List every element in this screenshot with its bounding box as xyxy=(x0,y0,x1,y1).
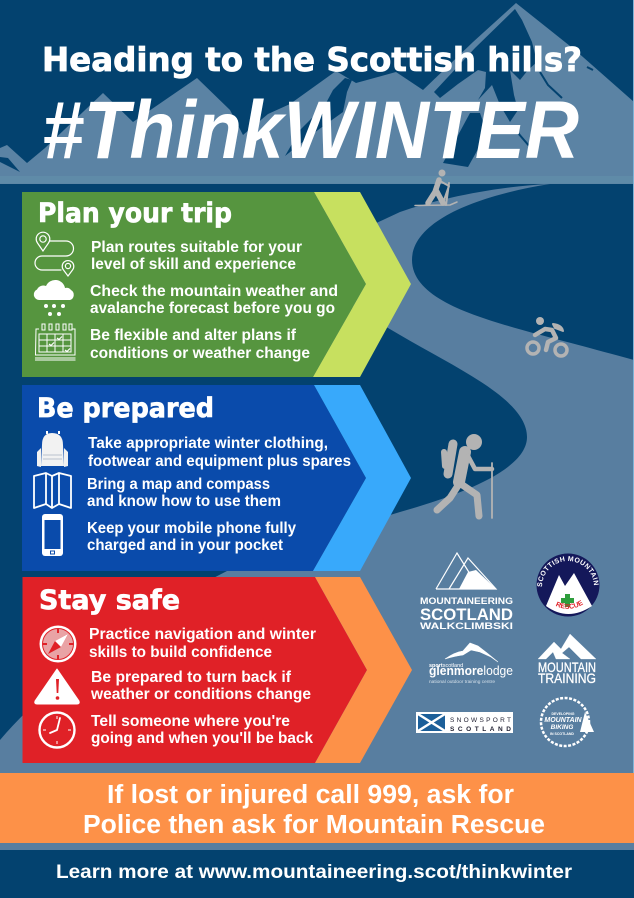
logo: glenmore lodge: sportscotland xyxy=(429,663,463,669)
logo: mountain training: TRAINING xyxy=(538,670,596,686)
text: clothing: Take appropriate winter clothing, xyxy=(88,435,328,452)
icon: cyclist xyxy=(527,317,567,356)
text: turn back: Be prepared to turn back if xyxy=(91,669,292,686)
icon: clock xyxy=(40,712,74,748)
callout: emergency: If lost or injured call 999, ask for xyxy=(107,781,514,809)
text: flexible: conditions or weather change xyxy=(90,345,310,362)
text: turn back xyxy=(90,669,311,703)
callout: emergency xyxy=(0,773,634,843)
text: tell someone: Tell someone where you're xyxy=(91,713,290,730)
logo: glenmore lodge: national outdoor training centre xyxy=(429,679,496,684)
icon: calendar xyxy=(35,324,76,360)
logo: snowsport scotland: SNOWSPORT xyxy=(450,717,511,724)
title: heading: Heading to the Scottish hills? xyxy=(42,40,582,79)
text: mobile phone: charged and in your pocket xyxy=(87,537,283,554)
text: clothing: footwear and equipment plus spares xyxy=(88,453,351,470)
winding path xyxy=(0,184,634,774)
logo: glenmore lodge: glenmorelodge xyxy=(429,664,513,678)
text: map and compass xyxy=(87,476,281,510)
logo: mountaineering scotland xyxy=(420,553,513,632)
title: hashtag: #ThinkWINTER xyxy=(42,85,579,176)
panel: plan your trip xyxy=(22,192,411,377)
icon: compass xyxy=(40,626,76,662)
text: weather: avalanche forecast before you go xyxy=(90,300,335,317)
heading: be prepared: Be prepared xyxy=(37,393,214,424)
logo: scottish mountain rescue xyxy=(536,554,600,616)
text: weather: Check the mountain weather and xyxy=(90,283,338,300)
logo: scottish mountain rescue: SCOTTISH MOUNTAIN xyxy=(537,556,599,587)
icon: hiker xyxy=(437,434,492,518)
icon: snow cloud xyxy=(34,280,74,316)
icon: skier xyxy=(415,170,457,206)
text: mobile phone: Keep your mobile phone fully xyxy=(87,520,296,537)
icon: route xyxy=(35,232,74,276)
logo: snowsport scotland: SCOTLAND xyxy=(450,726,511,733)
text: navigation xyxy=(89,626,316,661)
text: tell someone: going and when you'll be back xyxy=(91,730,313,747)
logo: mountain training: MOUNTAIN xyxy=(538,659,596,675)
text: clothing xyxy=(88,435,351,470)
icon: backpack xyxy=(37,431,68,467)
text: tell someone xyxy=(91,713,313,747)
logo: mountain biking xyxy=(541,698,594,746)
text: routes: Plan routes suitable for your xyxy=(91,239,302,256)
logo: mountain biking: DEVELOPING xyxy=(552,712,575,716)
logo: mountain biking: IN SCOTLAND xyxy=(550,732,574,736)
logo: mountain training xyxy=(538,634,596,686)
text: map and compass: and know how to use them xyxy=(87,493,281,510)
logo: mountaineering scotland: WALKCLIMBSKI xyxy=(420,621,513,632)
icon: map xyxy=(34,473,71,508)
text: flexible: Be flexible and alter plans if xyxy=(90,327,297,344)
callout: emergency: Police then ask for Mountain Rescue xyxy=(83,811,545,839)
logo: glenmore lodge xyxy=(429,643,513,684)
panel: be prepared xyxy=(22,385,411,571)
text: weather xyxy=(90,283,338,317)
text: flexible xyxy=(90,327,310,362)
text: routes: level of skill and experience xyxy=(91,256,296,273)
text: turn back: weather or conditions change xyxy=(90,686,311,703)
text: routes xyxy=(91,239,302,273)
logo: mountain biking: MOUNTAIN xyxy=(544,717,583,724)
logo: mountain biking: BIKING xyxy=(551,724,573,731)
logo: scottish mountain rescue: RESCUE xyxy=(556,600,584,609)
text: map and compass: Bring a map and compass xyxy=(87,476,270,493)
panel: stay safe xyxy=(22,577,412,763)
footer: website link: Learn more at www.mountaineering.scot/thinkwinter xyxy=(56,862,573,883)
icon: warning triangle xyxy=(35,669,79,704)
text: mobile phone xyxy=(87,520,296,554)
heading: plan your trip: Plan your trip xyxy=(38,198,232,229)
logo: mountaineering scotland: SCOTLAND xyxy=(420,606,513,624)
heading: stay safe: Stay safe xyxy=(39,585,180,616)
text: navigation: Practice navigation and winter xyxy=(89,626,316,643)
footer: website link xyxy=(0,850,634,898)
logo: mountaineering scotland: MOUNTAINEERING xyxy=(420,596,513,607)
logo: snowsport scotland xyxy=(416,712,513,733)
icon: phone xyxy=(42,514,63,556)
text: navigation: skills to build confidence xyxy=(89,644,272,661)
mountain range backdrop xyxy=(0,3,634,184)
